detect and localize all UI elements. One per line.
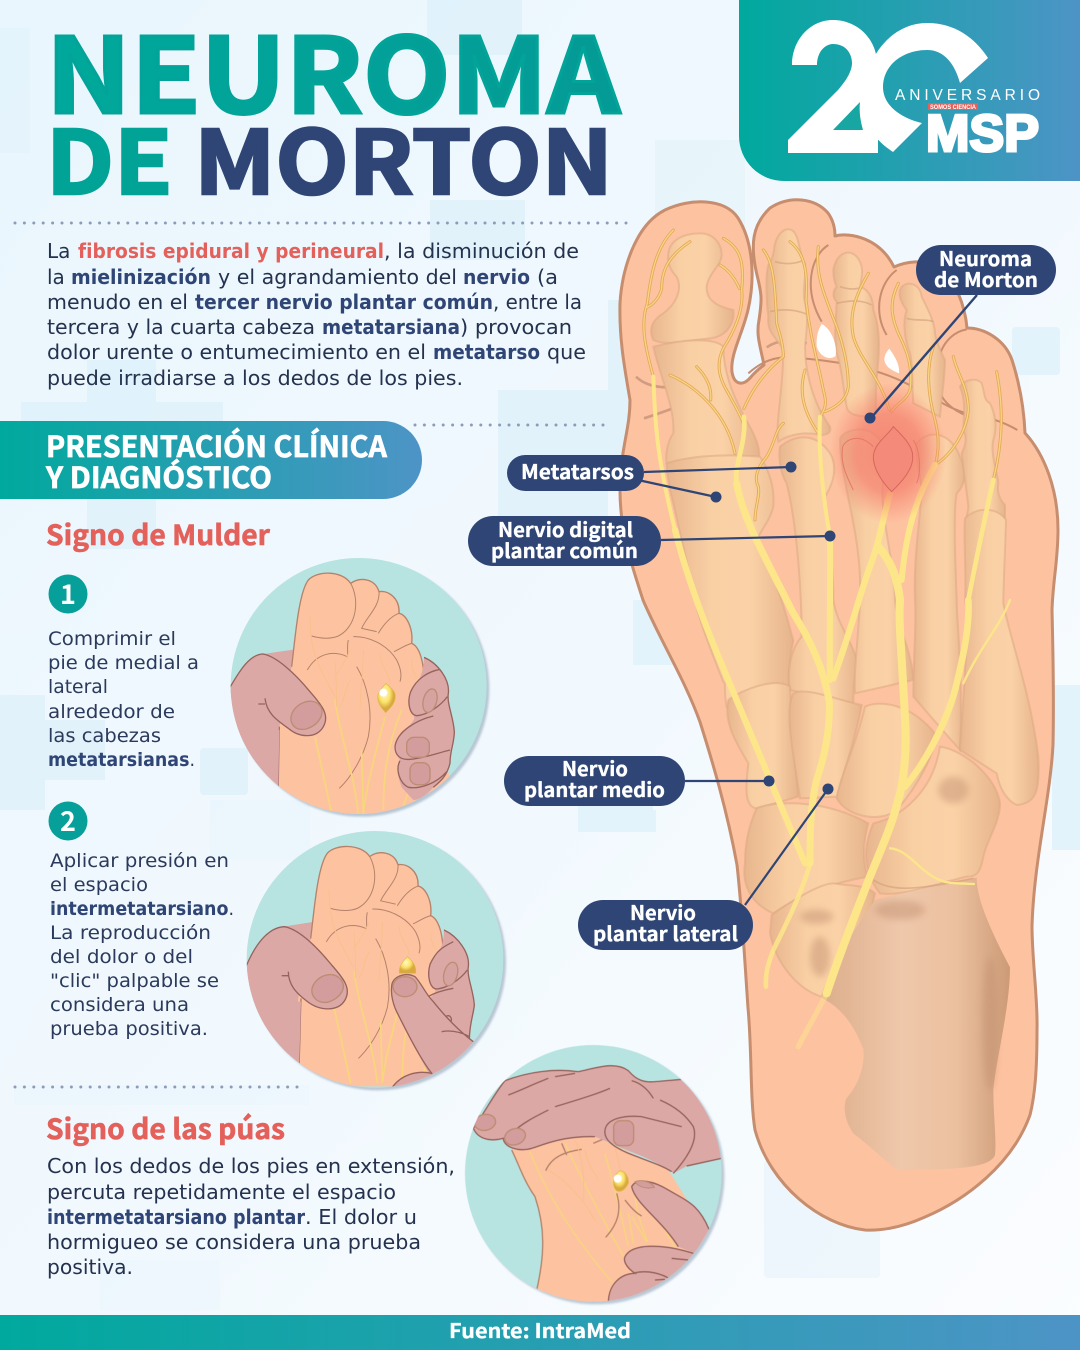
intro paragraph: menudo en el [47, 290, 188, 314]
neuroma lens [613, 1171, 628, 1191]
bones [651, 229, 1039, 997]
intro paragraph: nervio [463, 265, 530, 289]
foot silhouette [620, 200, 1058, 1230]
callout: Nervio digital plantar común: plantar común [491, 535, 638, 564]
illustration: Mulder step 1 [230, 558, 490, 818]
footer source: Fuente: IntraMed [449, 1315, 631, 1344]
section banner [0, 421, 422, 499]
callout: Nervio plantar medio: plantar medio [524, 774, 665, 803]
main nerves [653, 377, 993, 993]
púas text: . El dolor u [305, 1205, 417, 1229]
púas text: percuta repetidamente el espacio [47, 1180, 396, 1204]
foot [512, 1133, 712, 1310]
púas text [47, 1154, 455, 1279]
callout: Neuroma de Morton: Neuroma [939, 243, 1032, 272]
step 2 text: La reproducción [50, 922, 211, 944]
callout: Nervio digital plantar común: Nervio digital [498, 514, 633, 543]
toe gaps [817, 324, 899, 373]
step 2 text: el espacio [50, 874, 148, 896]
intro paragraph: tercera y la cuarta cabeza [47, 315, 315, 339]
step 1 text: las cabezas [48, 725, 161, 747]
number badge 1: 1 [60, 573, 76, 612]
step 2 text: "clic" palpable se [50, 970, 219, 992]
thumb [240, 927, 347, 1063]
bone shading [770, 261, 973, 888]
intro paragraph: dolor urente o entumecimiento en el [47, 340, 426, 364]
step 1 text [48, 628, 199, 771]
thin toe nerves [644, 230, 1001, 520]
illustration: púas [455, 1040, 735, 1310]
number badge 2: 2 [60, 800, 76, 839]
thumb [230, 654, 325, 786]
step 2 text: considera una [50, 994, 189, 1016]
púas text: positiva. [47, 1255, 133, 1279]
calcaneus [822, 878, 1010, 1169]
foot anatomy illustration [620, 200, 1058, 1230]
step 1 text: Comprimir el [48, 628, 176, 650]
intro paragraph: la [47, 265, 65, 289]
step 1 text: lateral [48, 676, 108, 698]
intro paragraph: mielinización [71, 265, 211, 289]
callout: Neuroma de Morton: de Morton [934, 264, 1038, 293]
number badge 1 [48, 573, 88, 614]
intro paragraph: tercer nervio plantar común [195, 290, 493, 314]
intro paragraph: (a [537, 265, 558, 289]
logo: number 0 [863, 23, 988, 152]
neuroma [842, 427, 920, 492]
footer source [0, 1315, 1080, 1350]
lower hand [609, 1246, 694, 1301]
heading: Signo de Mulder: Signo de Mulder [46, 514, 271, 554]
callout: Nervio digital plantar común [468, 514, 836, 566]
step 1 text: pie de medial a [48, 652, 199, 674]
neuroma glow [830, 383, 947, 523]
step 2 text: Aplicar presión en [50, 850, 229, 872]
intro paragraph: , la disminución de [384, 239, 579, 263]
intro paragraph: metatarsiana [322, 315, 460, 339]
pressing finger [391, 975, 473, 1078]
toe outlines and creases [748, 245, 1017, 430]
intro paragraph: puede irradiarse a los dedos de los pies. [47, 366, 463, 390]
intro paragraph: ) provocan [460, 315, 572, 339]
step 2 text [50, 850, 234, 1040]
section banner: PRESENTACIÓN CLÍNICA [46, 424, 387, 466]
intro paragraph: y el agrandamiento del [218, 265, 457, 289]
tapping finger [632, 1181, 709, 1253]
forefoot and rearfoot, traced at 3x [636, 229, 1039, 1169]
intro paragraph: fibrosis epidural y perineural [78, 239, 384, 263]
intro paragraph: metatarso [433, 340, 540, 364]
logo: MSP: MSP [926, 105, 1039, 163]
neuroma lens [378, 683, 395, 713]
step 2 text: del dolor o del [50, 946, 193, 968]
callout: Nervio plantar lateral: Nervio [630, 897, 696, 926]
step 2 text: prueba positiva. [50, 1018, 208, 1040]
callout: Metatarsos [507, 455, 796, 502]
intro paragraph: que [547, 340, 586, 364]
logo: aniversario: ANIVERSARIO [895, 87, 1040, 104]
intro paragraph: , entre la [493, 290, 582, 314]
top hand [473, 1066, 728, 1173]
callout: Nervio plantar lateral [578, 784, 834, 950]
anniversary badge [739, 0, 1080, 181]
púas text: hormigueo se considera una prueba [47, 1230, 421, 1254]
callout: Metatarsos: Metatarsos [521, 456, 634, 485]
step 1 text: metatarsianas. [48, 749, 195, 771]
púas text: Con los dedos de los pies en extensión, [47, 1154, 455, 1178]
title: DE MORTON [46, 93, 613, 220]
right hand fingers [396, 657, 454, 800]
logo: number 2 [788, 20, 878, 153]
right hand [429, 930, 474, 1070]
púas text: intermetatarsiano plantar [47, 1205, 305, 1229]
title [46, 0, 621, 220]
intro paragraph: La [47, 239, 70, 263]
number badge 2 [48, 800, 88, 840]
intro paragraph [47, 239, 586, 390]
step 2 text: intermetatarsiano. [50, 898, 234, 920]
logo: counter of the 2 [833, 102, 863, 130]
illustration: Mulder step 2 [246, 831, 507, 1092]
logo: somos ciencia tag: SOMOS CIENCIA [930, 104, 976, 111]
neuroma lens [399, 957, 416, 973]
callout: Nervio plantar medio [504, 753, 774, 806]
callout: Nervio plantar medio: Nervio [562, 753, 628, 782]
heading: Signo de las púas: Signo de las púas [46, 1108, 285, 1148]
section banner: Y DIAGNÓSTICO [45, 455, 272, 497]
callout: Neuroma de Morton [864, 243, 1056, 424]
callout: Nervio plantar lateral: plantar lateral [593, 918, 738, 947]
step 1 text: alrededor de [48, 701, 175, 723]
